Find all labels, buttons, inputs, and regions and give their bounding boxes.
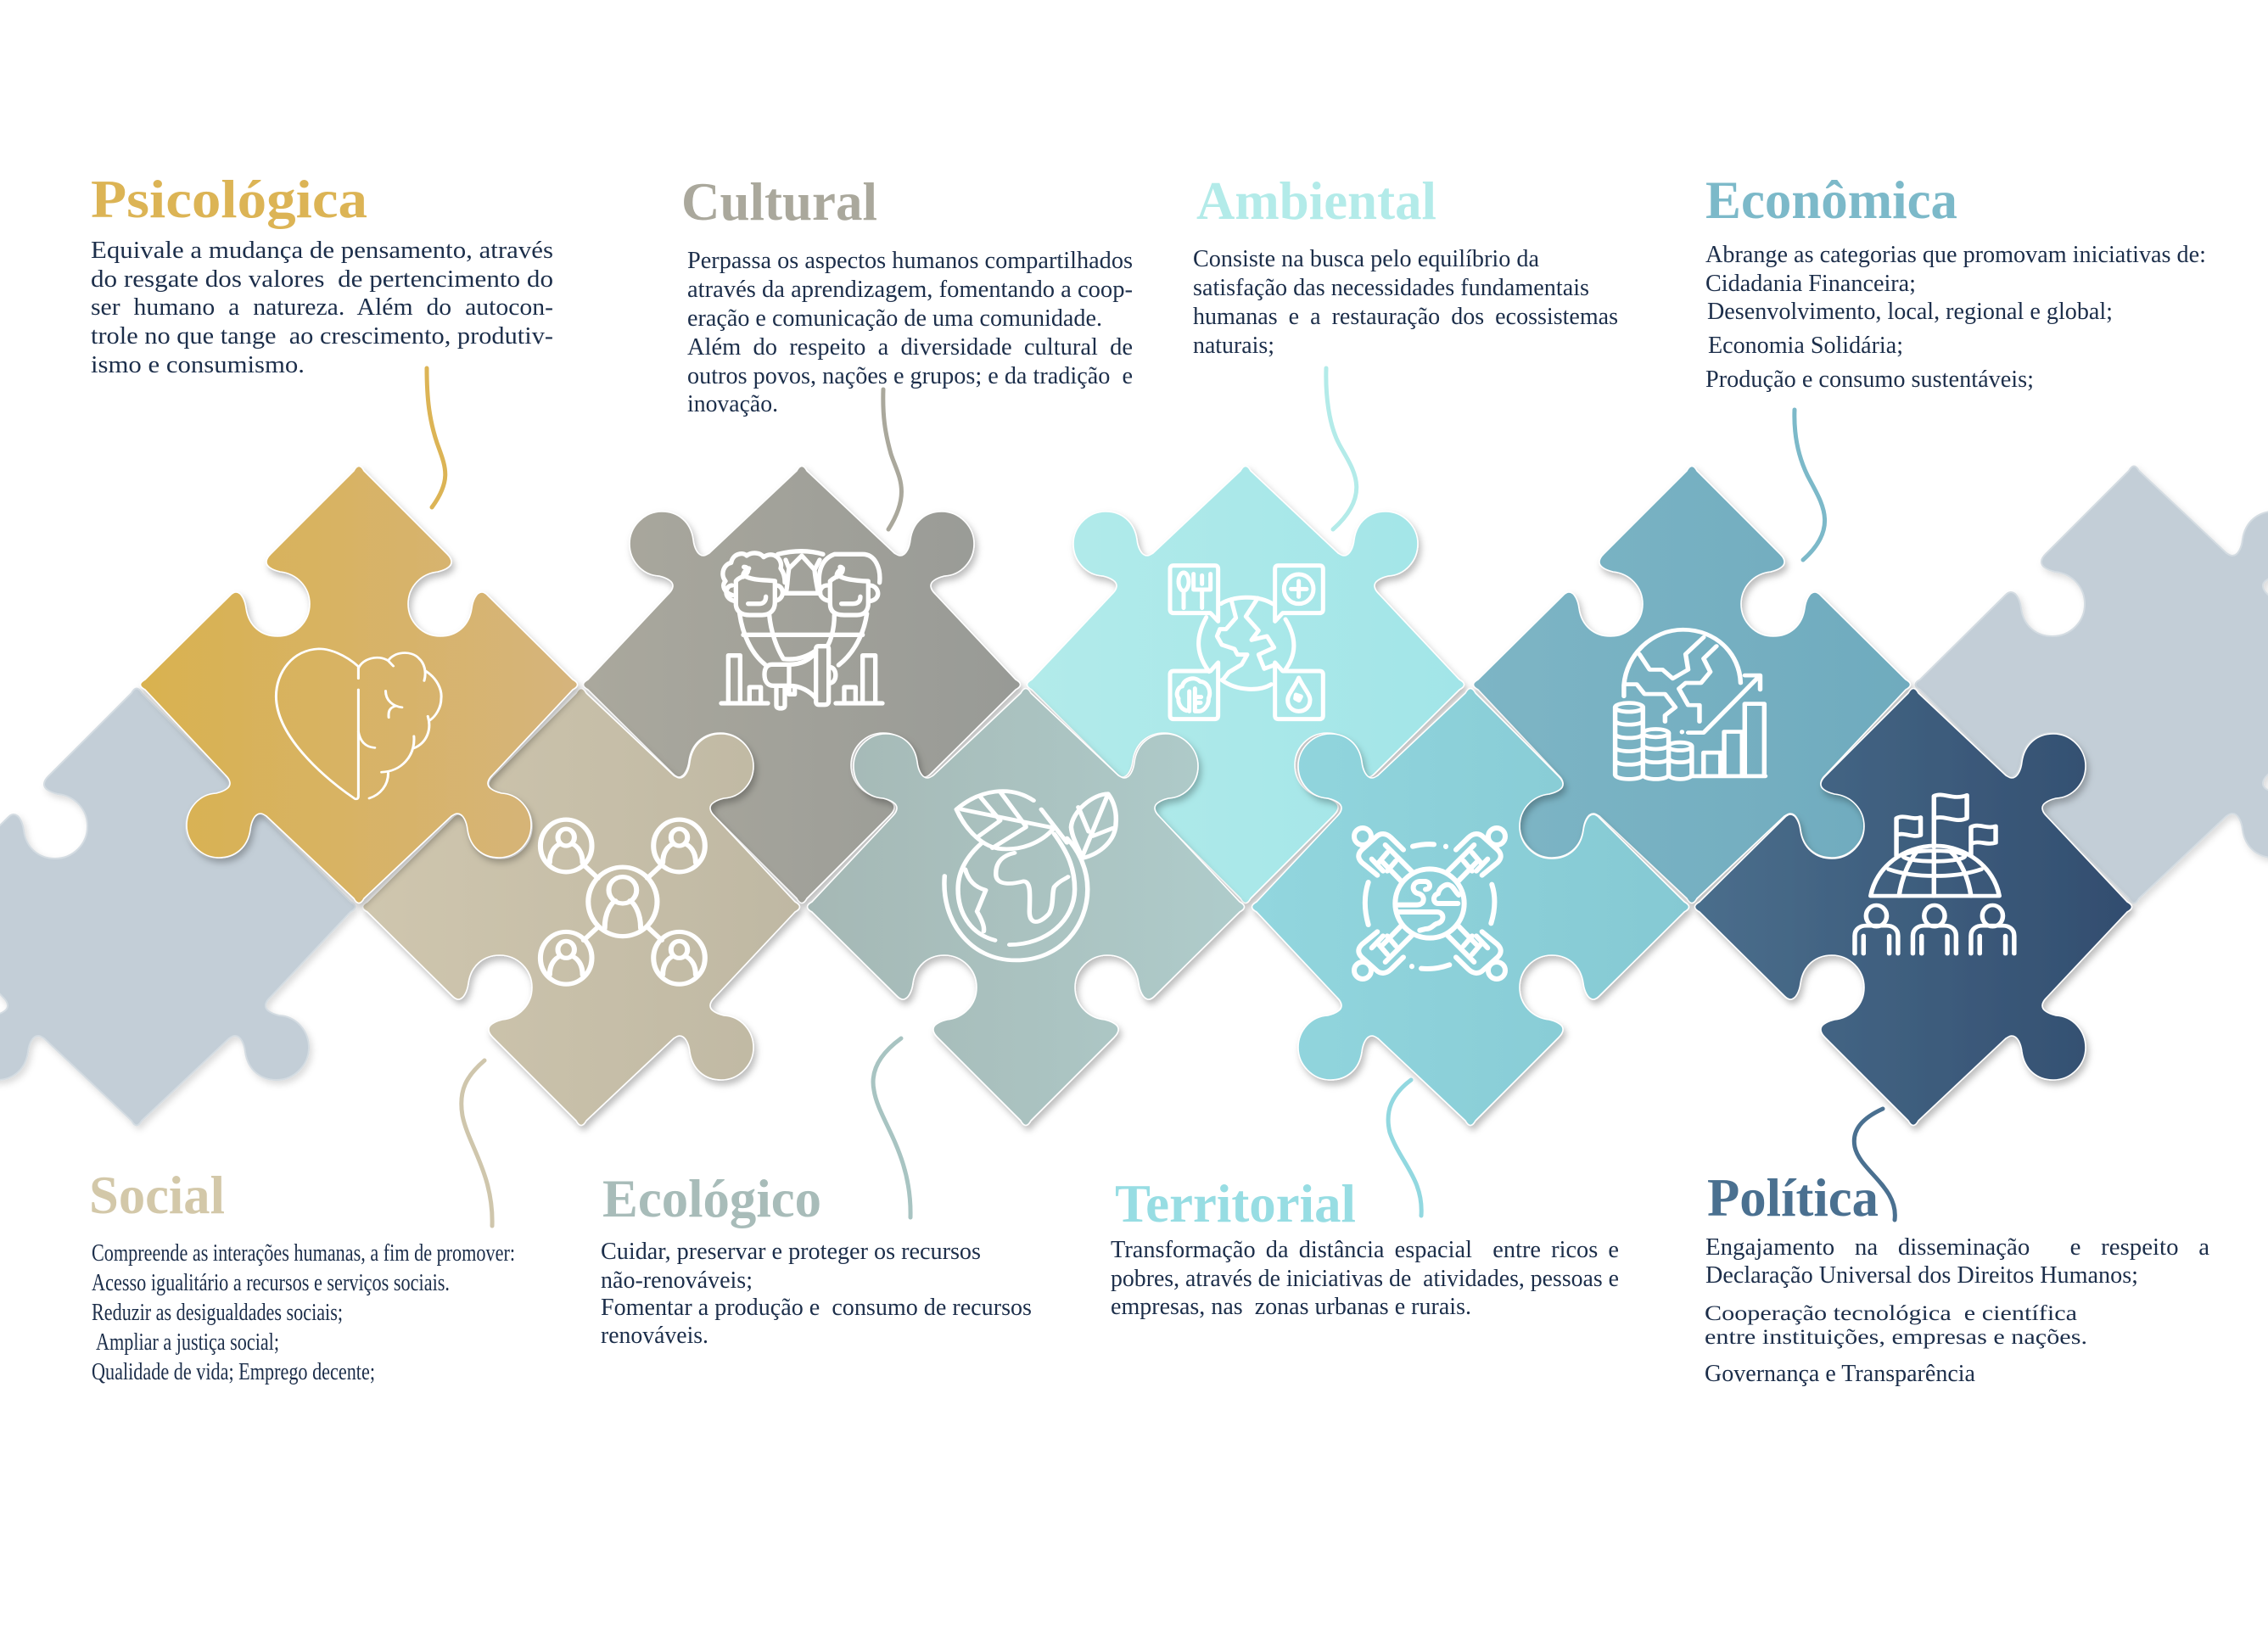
puzzle piece: Política	[1695, 689, 2131, 1125]
text block: Cultural: através da aprendizagem, fomentando a coop-	[687, 277, 1133, 303]
text block: Territorial: pobres, através de iniciativas de atividades, pessoas e	[1111, 1266, 1619, 1292]
puzzle piece: Econômica	[1473, 467, 1911, 903]
text block: Ecológico: Cuidar, preservar e proteger os recursos	[601, 1239, 981, 1265]
text block: Psicológica: ser humano a natureza. Além do autocon-	[91, 294, 553, 321]
text block: Psicológica: Equivale a mudança de pensamento, através	[91, 238, 553, 264]
text block: Cultural: eração e comunicação de uma comunidade.	[687, 305, 1102, 332]
text block: Ecológico: renováveis.	[601, 1323, 708, 1349]
text block: Política: Cooperação tecnológica e científica	[1705, 1302, 2077, 1325]
text block: Econômica: Abrange as categorias que promovam iniciativas de:	[1705, 242, 2206, 268]
panel: Ecológico	[601, 1038, 1032, 1349]
text block: Ambiental: humanas e a restauração dos ecossistemas	[1193, 304, 1618, 330]
text block: Territorial: Transformação da distância espacial entre ricos e	[1111, 1237, 1619, 1263]
puzzle chain	[0, 467, 2268, 1125]
text block: Política: Declaração Universal dos Direitos Humanos;	[1705, 1262, 2138, 1289]
text block: Cultural: Além do respeito a diversidade cultural de	[687, 334, 1133, 361]
panel: Cultural	[681, 171, 1133, 529]
icon: globe, coins and growth chart	[1616, 629, 1766, 779]
puzzle piece: Psicológica	[141, 467, 577, 903]
text block: Econômica: Cidadania Financeira;	[1705, 271, 1916, 297]
text block: Psicológica: do resgate dos valores de pertencimento do	[91, 266, 553, 293]
text block: Ecológico: não-renováveis;	[601, 1267, 753, 1294]
text block: Ecológico: Fomentar a produção e consumo de recursos	[601, 1295, 1032, 1321]
icon: heart and brain	[276, 649, 441, 799]
panel: Psicológica	[91, 169, 553, 507]
text block: Econômica	[1705, 242, 2206, 393]
text block: Social: Qualidade de vida; Emprego decente;	[92, 1358, 375, 1385]
heading: Ambiental: Ambiental	[1196, 171, 1436, 231]
puzzle piece: Ecológico	[808, 689, 1244, 1125]
icon: flags, globe dome and people	[1855, 795, 2014, 954]
heading: Cultural: Cultural	[681, 171, 877, 232]
heading: Social: Social	[89, 1165, 225, 1225]
connector: Econômica	[1795, 410, 1825, 560]
panel: Ambiental	[1193, 171, 1618, 529]
heading: Psicológica: Psicológica	[91, 169, 367, 229]
heading: Econômica: Econômica	[1705, 170, 1957, 230]
text block: Territorial	[1111, 1237, 1619, 1320]
text block: Econômica: Produção e consumo sustentáveis;	[1705, 366, 2034, 393]
text block: Política	[1705, 1234, 2210, 1387]
puzzle piece: Social	[363, 689, 799, 1125]
text block: Social: Acesso igualitário a recursos e serviços sociais.	[92, 1269, 450, 1296]
connector: Psicológica	[427, 368, 445, 507]
heading: Territorial: Territorial	[1115, 1173, 1356, 1233]
text block: Psicológica: trole no que tange ao crescimento, produtiv-	[91, 323, 553, 350]
puzzle piece: blank right	[1916, 467, 2268, 903]
text block: Ecológico	[601, 1239, 1032, 1349]
icon: globe with leaves	[944, 792, 1116, 960]
text block: Social: Compreende as interações humanas, a fim de promover:	[92, 1239, 515, 1267]
text block: Social: Reduzir as desigualdades sociais;	[92, 1299, 343, 1326]
text block: Psicológica: ismo e consumismo.	[91, 352, 305, 378]
puzzle piece: Cultural	[584, 467, 1020, 903]
connector: Territorial	[1388, 1080, 1421, 1216]
puzzle piece: Ambiental	[1027, 467, 1464, 903]
text block: Política: entre instituições, empresas e nações.	[1705, 1326, 2087, 1349]
heading: Política: Política	[1707, 1167, 1879, 1228]
text block: Econômica: Economia Solidária;	[1708, 333, 1903, 359]
icon: globe with food, health, tree and water	[1170, 566, 1323, 719]
panel: Social	[89, 1060, 515, 1385]
text block: Ambiental: satisfação das necessidades fundamentais	[1193, 275, 1589, 301]
text block: Ambiental: naturais;	[1193, 333, 1274, 359]
puzzle piece: Territorial	[1252, 689, 1688, 1125]
text block: Social: Ampliar a justiça social;	[96, 1329, 279, 1356]
panel: Territorial	[1111, 1080, 1619, 1320]
heading: Ecológico: Ecológico	[602, 1168, 821, 1228]
text block: Cultural: inovação.	[687, 391, 778, 417]
text block: Ambiental	[1193, 246, 1618, 359]
text block: Política: Governança e Transparência	[1705, 1361, 1976, 1387]
text block: Cultural	[687, 248, 1133, 417]
text block: Psicológica	[91, 238, 553, 378]
text block: Social	[92, 1239, 515, 1385]
connector: Ecológico	[873, 1038, 910, 1217]
text block: Econômica: Desenvolvimento, local, regional e global;	[1707, 299, 2113, 325]
connector: Ambiental	[1326, 368, 1357, 529]
text block: Ambiental: Consiste na busca pelo equilíbrio da	[1193, 246, 1540, 272]
text block: Política: Engajamento na disseminação e respeito a	[1705, 1234, 2210, 1261]
connector: Política	[1854, 1109, 1895, 1220]
connector: Cultural	[883, 389, 901, 529]
puzzle piece: blank left	[0, 689, 355, 1125]
connector: Social	[462, 1060, 492, 1226]
text block: Cultural: Perpassa os aspectos humanos compartilhados	[687, 248, 1133, 274]
icon: people, globe and megaphone	[721, 551, 882, 708]
panel: Econômica	[1705, 170, 2206, 560]
panel: Política	[1705, 1109, 2210, 1387]
text block: Cultural: outros povos, nações e grupos; e da tradição e	[687, 363, 1133, 389]
icon: people network	[540, 820, 705, 984]
icon: globe with people around	[1354, 828, 1505, 979]
text block: Territorial: empresas, nas zonas urbanas e rurais.	[1111, 1294, 1471, 1320]
